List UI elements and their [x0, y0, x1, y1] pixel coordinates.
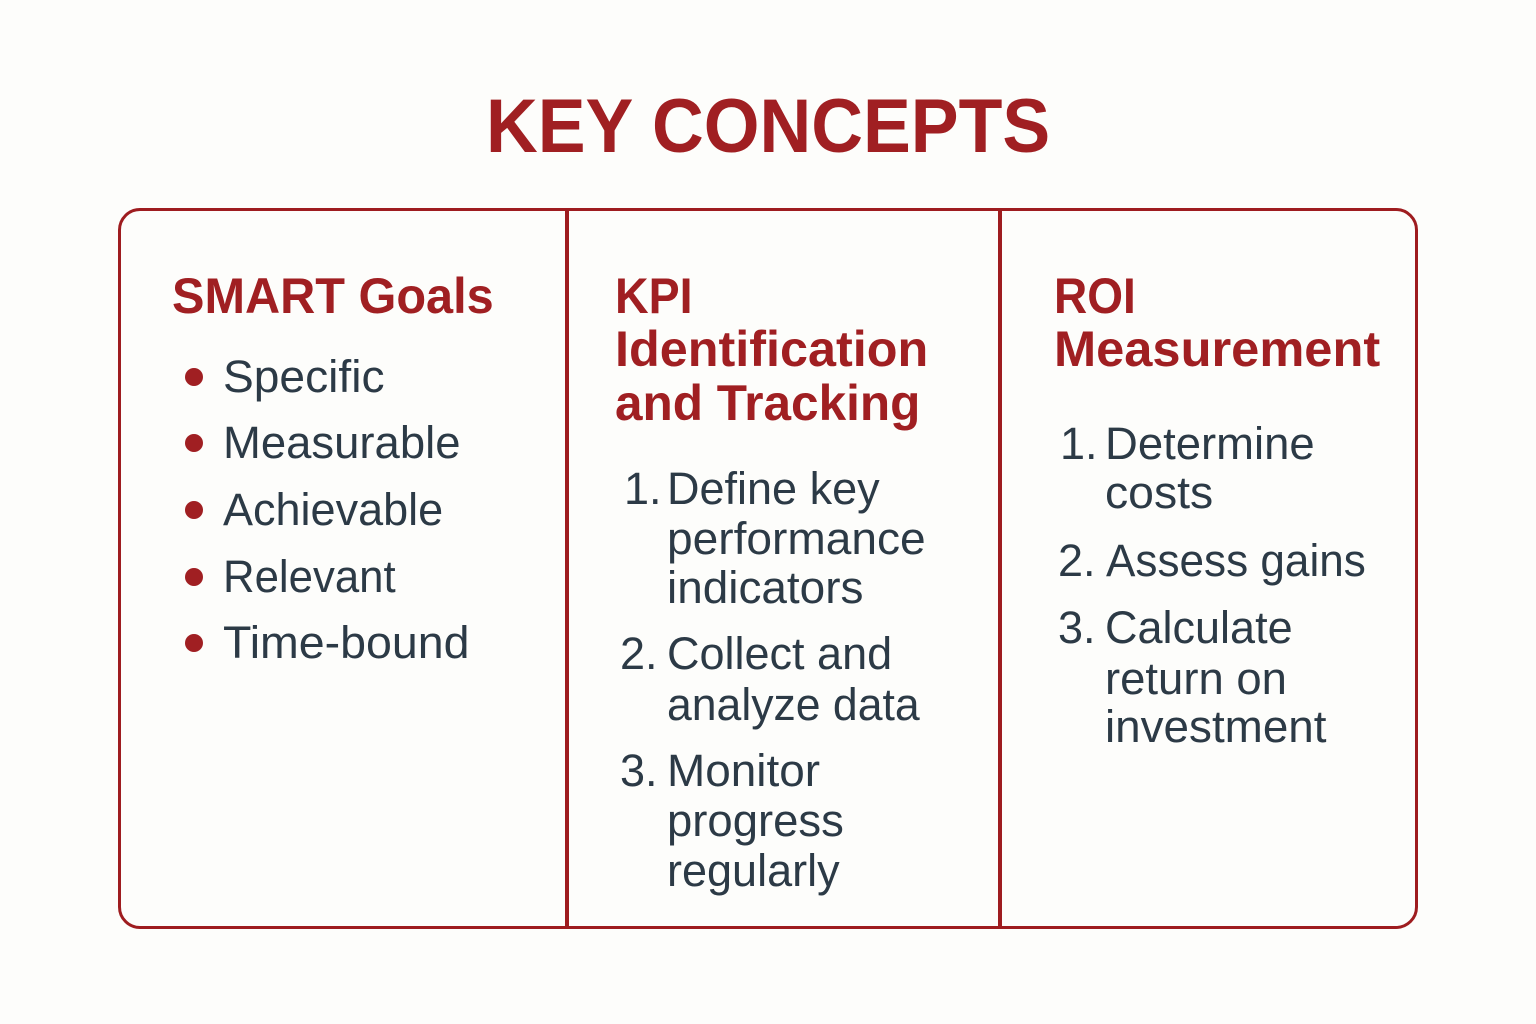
- title: KEY CONCEPTS: [486, 84, 1050, 169]
- heading: SMART Goals: SMART Goals: [172, 268, 494, 324]
- step 2: Assess gains: 2.: [1058, 535, 1096, 586]
- step 1: Define key performance indicators: 1.: [624, 463, 662, 514]
- panel: SMART Goals: [172, 268, 494, 668]
- step 2: Assess gains: Assess gains: [1106, 535, 1366, 586]
- step 1: Define key performance indicators: [624, 463, 926, 613]
- step 1: Define key performance indicators: Define key: [667, 463, 880, 514]
- bullet: Time-bound: Time-bound: [223, 617, 470, 668]
- bullet: Measurable: Measurable: [223, 417, 460, 468]
- bullet: Specific: Specific: [223, 351, 385, 402]
- step 1: Define key performance indicators: indicators: [667, 562, 863, 613]
- step 1: Determine costs: 1.: [1060, 418, 1098, 469]
- step 3: Calculate return on investment: 3.: [1058, 602, 1096, 653]
- step 3: Calculate return on investment: [1058, 602, 1327, 752]
- panel: KPI Identification and Tracking: [615, 268, 928, 896]
- step 2: Collect and analyze data: 2.: [620, 628, 658, 679]
- bullet: Achievable: Achievable: [223, 484, 443, 535]
- heading: ROI Measurement: ROI: [1054, 268, 1136, 324]
- step 3: Calculate return on investment: investment: [1105, 701, 1327, 752]
- heading: KPI Identification and Tracking: Identification: [615, 321, 928, 377]
- step 3: Monitor progress regularly: progress: [667, 795, 844, 846]
- step 1: Determine costs: [1060, 418, 1315, 518]
- bullet: Relevant: Relevant: [223, 551, 396, 602]
- heading: KPI Identification and Tracking: [615, 268, 928, 431]
- step 1: Determine costs: costs: [1105, 467, 1213, 518]
- step 3: Calculate return on investment: return on: [1105, 653, 1287, 704]
- step 2: Collect and analyze data: analyze data: [667, 679, 920, 730]
- step 2: Collect and analyze data: Collect and: [667, 628, 892, 679]
- column divider left: [565, 210, 568, 926]
- panel: ROI Measurement: [1054, 268, 1380, 752]
- step 1: Determine costs: Determine: [1105, 418, 1315, 469]
- step 3: Monitor progress regularly: 3.: [620, 745, 658, 796]
- step 2: Collect and analyze data: [620, 628, 920, 730]
- heading: KPI Identification and Tracking: and Tracking: [615, 375, 920, 431]
- table frame: [118, 208, 1418, 929]
- step 3: Monitor progress regularly: Monitor: [667, 745, 820, 796]
- column divider right: [998, 210, 1002, 926]
- step 3: Calculate return on investment: Calculate: [1105, 602, 1293, 653]
- step 3: Monitor progress regularly: [620, 745, 844, 896]
- step 1: Define key performance indicators: performance: [667, 513, 926, 564]
- heading: ROI Measurement: Measurement: [1054, 321, 1380, 377]
- heading: ROI Measurement: [1054, 268, 1380, 377]
- step 3: Monitor progress regularly: regularly: [667, 845, 840, 896]
- heading: KPI Identification and Tracking: KPI: [615, 268, 693, 324]
